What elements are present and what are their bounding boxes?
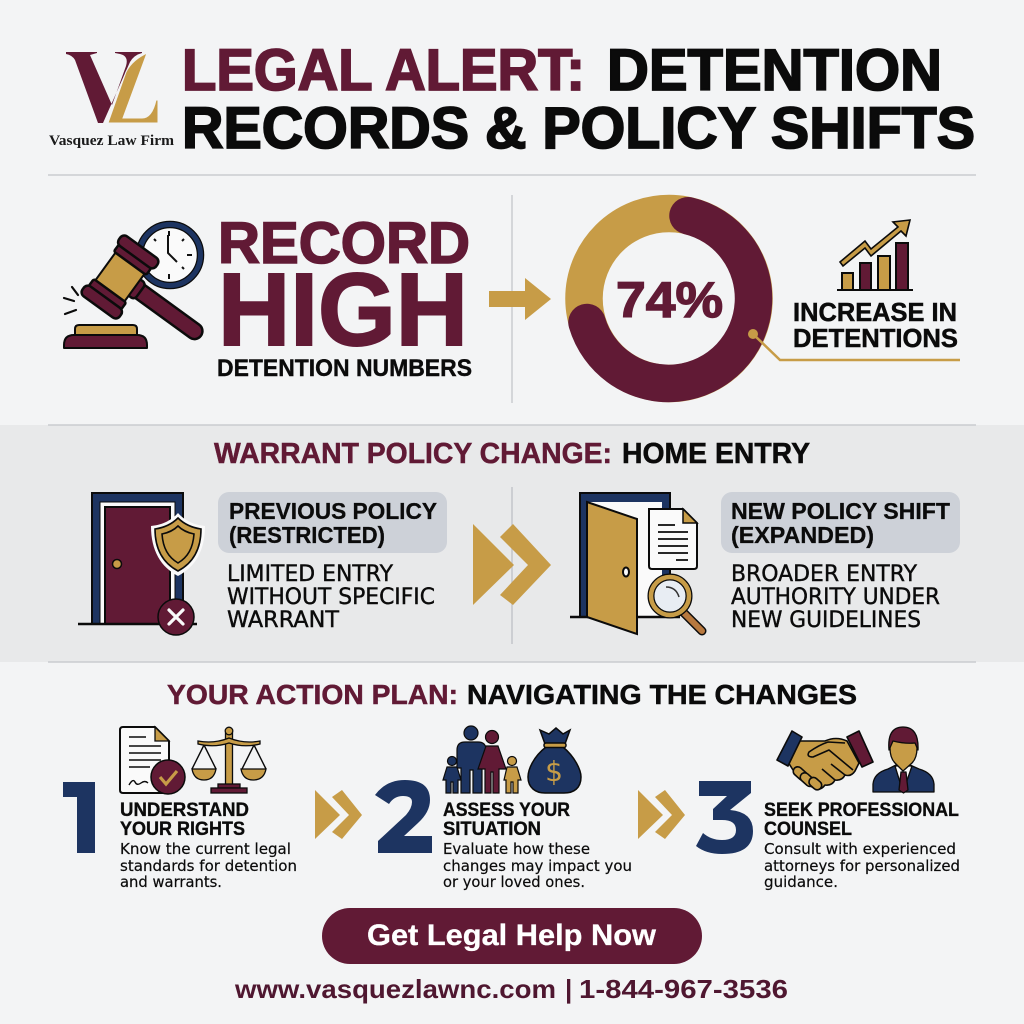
previous policy description: WITHOUT SPECIFIC [227,585,435,610]
button: get legal help now: Get Legal Help Now [367,919,657,952]
icon: money bag: $ [545,755,563,788]
document [649,509,697,569]
text: increase in detentions: INCREASE IN [793,299,957,327]
icon: open door with document and magnifier [570,493,702,634]
logo: Vasquez Law Firm [49,52,174,149]
heading: your action plan: NAVIGATING THE CHANGES [467,679,857,710]
previous policy description: LIMITED ENTRY [227,562,394,587]
number 1 [63,782,95,853]
icon: money bag [528,728,581,793]
previous policy label [218,492,447,553]
step 2 text: changes may impact you [443,857,632,875]
panel: warrant policy change [0,425,1024,662]
arrow: chevron 1 to 2 [315,790,362,839]
text: increase in detentions: DETENTIONS [793,325,958,353]
x badge [158,599,194,635]
donut chart: 74% [584,214,754,384]
new policy description [731,562,940,633]
step 3: seek professional counsel [696,727,960,891]
new policy label [721,492,960,553]
step 1 text: YOUR RIGHTS [120,818,245,840]
icon: attorney [873,727,934,793]
arrow: double chevron [473,524,551,605]
title: LEGAL ALERT: [182,38,585,103]
new policy description: AUTHORITY UNDER [731,585,940,610]
step 1 text: UNDERSTAND [120,799,249,821]
step 2: assess your situation [375,726,632,891]
headline: record high: DETENTION NUMBERS [217,355,472,382]
gavel head and handle [80,234,223,366]
icon: closed door with shield [78,493,205,635]
step 3 text: attorneys for personalized [764,857,960,875]
step 1 text: standards for detention [120,857,297,875]
shield [151,513,205,576]
new policy description: BROADER ENTRY [731,562,918,587]
magnifier [651,577,702,631]
step 2 text: Evaluate how these [443,840,590,858]
contact line: www.vasquezlawnc.com [234,974,556,1004]
step 3 text: guidance. [764,873,838,891]
callout leader line [748,329,960,360]
headline: record high: HIGH [218,252,468,367]
contact line: 1-844-967-3536 [579,974,788,1004]
step 1 text: Know the current legal [120,840,291,858]
step 3 text: COUNSEL [764,818,852,840]
previous policy description: WARRANT [227,608,340,633]
step 3 text: Consult with experienced [764,840,956,858]
icon: family [443,726,521,793]
arrow [489,278,551,320]
contact line [234,974,788,1004]
title: RECORDS & POLICY SHIFTS [182,96,975,161]
icon: gavel and clock [64,224,223,366]
step 1 text: and warrants. [120,873,222,891]
headline: record high [217,211,472,382]
icon: handshake [777,731,873,792]
new policy label: NEW POLICY SHIFT [731,498,951,524]
new policy label: (EXPANDED) [731,522,874,548]
text: increase in detentions [793,299,958,353]
heading: your action plan: YOUR ACTION PLAN: [167,679,458,710]
icon: rising bar chart [837,220,913,290]
number 3 [696,781,753,854]
step 2 text: ASSESS YOUR [443,799,570,821]
headline: record high: RECORD [218,211,470,276]
logo monogram VL [66,52,158,123]
button: get legal help now [322,908,702,964]
new policy description: NEW GUIDELINES [731,608,921,633]
sound block [64,325,147,348]
clock [140,224,200,286]
step 1 text [120,799,297,891]
previous policy label: (RESTRICTED) [229,522,385,548]
icon: scales of justice [192,727,266,793]
panel heading [214,438,810,470]
donut chart: 74%: 74% [616,272,723,328]
heading: your action plan [167,679,857,710]
step 2 text [443,799,632,891]
step 2 text: SITUATION [443,818,541,840]
contact line: | [565,974,572,1004]
panel heading: WARRANT POLICY CHANGE: [214,438,612,470]
number 2 [375,780,432,853]
arrow: chevron 2 to 3 [638,790,685,839]
logo wordmark: Vasquez Law Firm [49,133,174,149]
panel heading: HOME ENTRY [622,438,810,470]
icon: document with check [120,727,185,794]
step 3 text [764,799,960,891]
previous policy label: PREVIOUS POLICY [229,498,437,524]
step 2 text: or your loved ones. [443,873,585,891]
title [182,38,975,161]
step 1: understand your rights [63,727,297,891]
title: DETENTION [607,38,942,103]
step 3 text: SEEK PROFESSIONAL [764,799,959,821]
previous policy description [227,562,435,633]
impact marks [64,287,78,314]
